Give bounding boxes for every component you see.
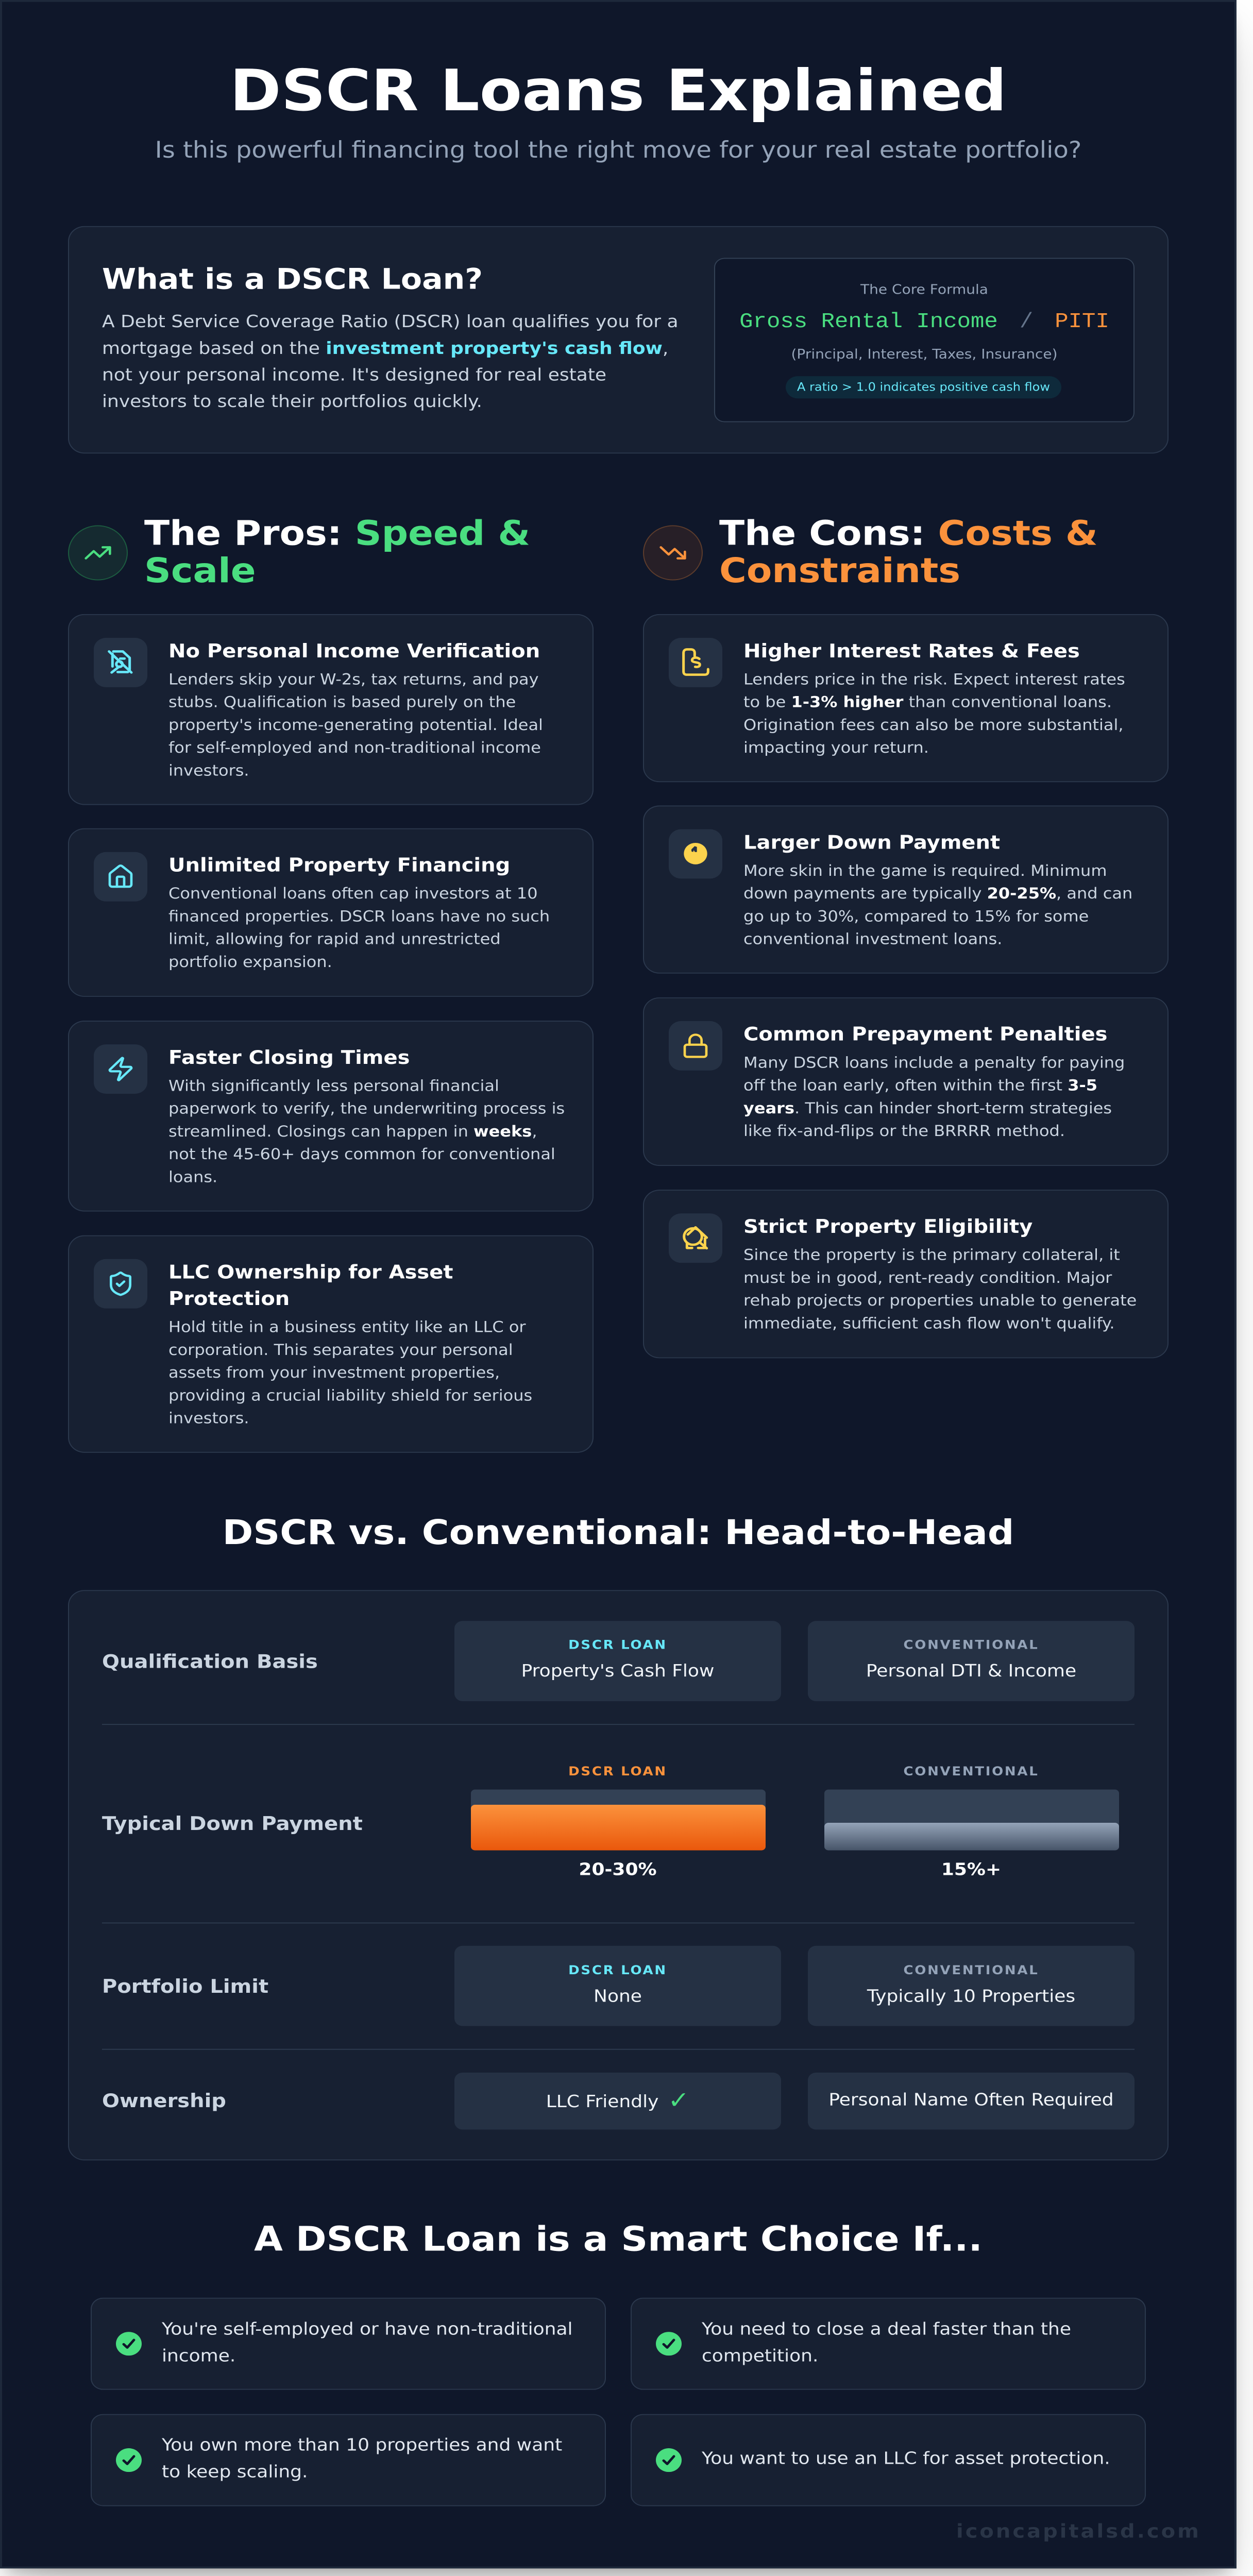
card text (168, 1077, 565, 1186)
card text: assets from your investment properties, (168, 1364, 500, 1382)
icon: lock (669, 1021, 722, 1071)
cons heading text: The Cons: Costs & (719, 513, 1098, 553)
card text: down payments are typically 20-25%, and can (743, 884, 1132, 902)
callout: more than 10 properties (91, 2414, 606, 2506)
card text: impacting your return. (743, 738, 929, 756)
cell: DSCR (454, 1946, 781, 2026)
icon: trending down (643, 526, 703, 580)
card text: More skin in the game is required. Minimum (743, 861, 1107, 879)
panel: pro card faster closing (68, 1021, 594, 1212)
card title: Strict Property Eligibility (743, 1216, 1032, 1238)
card title: No Personal Income Verification (168, 640, 540, 662)
panel: con card prepayment penalties (643, 997, 1169, 1166)
card text: years. This can hinder short-term strategies (743, 1099, 1112, 1117)
card text: Since the property is the primary collateral, it (743, 1246, 1120, 1264)
callout text (702, 2316, 1071, 2369)
heading: head-to-head: DSCR vs. Conventional: Head-to-Head (223, 1512, 1014, 1552)
row label: Typical Down Payment (102, 1813, 363, 1835)
text: definition: mortgage based on the investment property's cash flow, (102, 338, 668, 358)
card title: Larger Down Payment (743, 832, 1000, 854)
bar track (824, 1789, 1119, 1850)
card text: With significantly less personal financial (168, 1077, 499, 1095)
card text: portfolio expansion. (168, 953, 332, 971)
card text (168, 884, 550, 971)
cell value: Typically 10 Properties (867, 1987, 1075, 2006)
card text: go up to 30%, compared to 15% for some (743, 907, 1089, 925)
formula: Gross Rental Income / PITI (739, 310, 1109, 334)
card text: Origination fees can also be more substantial, (743, 716, 1124, 734)
footer: website: iconcapitalsd.com (956, 2520, 1201, 2543)
cell value: None (594, 1987, 642, 2006)
icon: check (656, 2448, 682, 2472)
callout text: competition. (702, 2346, 818, 2366)
panel: con card larger down payment (643, 805, 1169, 974)
card text: loans. (168, 1168, 217, 1186)
card text: Many DSCR loans include a penalty for paying (743, 1054, 1125, 1072)
bar label: CONVENTIONAL (904, 1765, 1039, 1778)
cell value: Personal Name Often Required (828, 2090, 1114, 2110)
card text (168, 1318, 532, 1427)
formula caption: The Core Formula (860, 282, 988, 297)
title: DSCR Loans Explained (230, 58, 1007, 124)
card text: paperwork to verify, the underwriting process is (168, 1099, 565, 1117)
card text (743, 670, 1125, 756)
bar label: DSCR LOAN (568, 1765, 667, 1778)
cell value: Property's Cash Flow (521, 1662, 714, 1681)
card title: Common Prepayment Penalties (743, 1024, 1107, 1045)
callout text: to keep scaling. (162, 2462, 308, 2482)
callout text (162, 2316, 573, 2369)
icon: check (116, 2448, 142, 2472)
card text: immediate, sufficient cash flow won't qualify. (743, 1314, 1115, 1332)
card text: Lenders skip your W-2s, tax returns, and pay (168, 670, 539, 688)
card text (743, 1054, 1125, 1140)
card title: LLC Ownership for Asset (168, 1261, 453, 1283)
bar value: 15%+ (941, 1860, 1001, 1879)
cell value: Personal DTI & Income (866, 1662, 1076, 1681)
panel: pro card no income verification (68, 614, 594, 805)
text: definition: investors to scale their portfolios quickly. (102, 392, 482, 411)
cell label: DSCR LOAN (568, 1638, 667, 1652)
card text: investors. (168, 761, 249, 779)
callout: close faster (631, 2298, 1146, 2390)
card text: corporation. This separates your personal (168, 1341, 513, 1359)
bar fill 75 percent (471, 1805, 766, 1850)
card text: like fix-and-flips or the BRRRR method. (743, 1122, 1065, 1140)
cell label: CONVENTIONAL (904, 1963, 1039, 1977)
card text: off the loan early, often within the first 3-5 (743, 1076, 1097, 1094)
panel: con card strict eligibility (643, 1190, 1169, 1358)
card title: Higher Interest Rates & Fees (743, 640, 1080, 662)
card text: Conventional loans often cap investors at 10 (168, 884, 538, 902)
text: definition (102, 312, 679, 411)
card text: streamlined. Closings can happen in weeks, (168, 1122, 537, 1140)
bar chart: conventional (824, 1765, 1119, 1879)
callout: LLC protection (631, 2414, 1146, 2506)
panel: pro card LLC ownership (68, 1235, 594, 1453)
panel: pro card unlimited financing (68, 828, 594, 997)
card title (168, 1261, 453, 1310)
card text: not the 45-60+ days common for conventional (168, 1145, 555, 1163)
card text: must be in good, rent-ready condition. Major (743, 1268, 1112, 1286)
icon: coin (669, 829, 722, 878)
bar value: 20-30% (579, 1860, 657, 1879)
ratio badge (786, 376, 1061, 398)
text: definition: A Debt Service Coverage Ratio (DSCR) loan qualifies you for a (102, 312, 679, 331)
text: definition: not your personal income. It's designed for real estate (102, 365, 606, 385)
pros heading text: The Pros: Speed & (144, 513, 530, 553)
card text: financed properties. DSCR loans have no such (168, 907, 550, 925)
cons heading text (719, 513, 1098, 590)
icon: check (116, 2332, 142, 2355)
pros heading text: Scale (144, 550, 256, 590)
card text: to be 1-3% higher than conventional loans. (743, 693, 1112, 711)
bar track (471, 1789, 766, 1850)
panel: comparison table (68, 1590, 1169, 2160)
cell: DSCR (454, 1621, 781, 1701)
card text: Hold title in a business entity like an LLC or (168, 1318, 526, 1336)
callout text: You want to use an LLC for asset protection. (702, 2449, 1110, 2468)
row: typical down payment (102, 1765, 1119, 1879)
cons heading text: Constraints (719, 550, 960, 590)
icon: house search (669, 1213, 722, 1263)
row: portfolio limit (102, 1945, 1135, 2026)
heading: what is a DSCR loan: What is a DSCR Loan? (102, 263, 483, 296)
heading: the pros (68, 513, 530, 590)
icon: trending up (68, 526, 128, 580)
card text: stubs. Qualification is based purely on the (168, 693, 516, 711)
formula note: (Principal, Interest, Taxes, Insurance) (791, 346, 1057, 362)
card title: Unlimited Property Financing (168, 854, 510, 876)
card text: property's income-generating potential. Ideal (168, 716, 543, 734)
card text: for self-employed and non-traditional income (168, 738, 541, 756)
card text: investors. (168, 1409, 249, 1427)
callout: self-employed (91, 2298, 606, 2390)
callout text: income. (162, 2346, 235, 2366)
panel: core formula (714, 258, 1135, 422)
card text (743, 861, 1132, 948)
heading: the cons (643, 513, 1098, 590)
cell: conventional (808, 1946, 1135, 2026)
callout text: You own more than 10 properties and want (162, 2435, 562, 2455)
card text (743, 1246, 1137, 1332)
icon: house (94, 852, 147, 902)
subtitle: Is this powerful financing tool the right move for your real estate portfolio? (155, 137, 1081, 163)
cell: DSCR (454, 2073, 781, 2129)
icon: no document (94, 638, 147, 687)
callout text: You need to close a deal faster than the (702, 2319, 1071, 2339)
panel: con card higher rates (643, 614, 1169, 782)
card title: Protection (168, 1288, 290, 1310)
pros heading text (144, 513, 530, 590)
ratio badge: A ratio > 1.0 indicates positive cash flow (797, 380, 1050, 394)
cell value with check: LLC Friendly ✓ (546, 2087, 689, 2114)
cell: conventional (808, 1621, 1135, 1701)
row label: Portfolio Limit (102, 1976, 268, 1997)
card text: limit, allowing for rapid and unrestricted (168, 930, 501, 948)
cell label: CONVENTIONAL (904, 1638, 1039, 1652)
icon: check (656, 2332, 682, 2355)
card text: conventional investment loans. (743, 930, 1002, 948)
card text: Lenders price in the risk. Expect interest rates (743, 670, 1125, 688)
panel: what is a DSCR loan (68, 226, 1169, 453)
row label: Ownership (102, 2090, 226, 2112)
row: qualification basis (102, 1621, 1135, 1701)
bar chart: DSCR (471, 1765, 766, 1879)
row: ownership (102, 2073, 1135, 2130)
callout text: You're self-employed or have non-traditional (162, 2319, 573, 2339)
icon: lightning (94, 1044, 147, 1094)
heading: smart choice: A DSCR Loan is a Smart Choice If... (254, 2219, 983, 2259)
bar fill 45 percent (824, 1823, 1119, 1850)
card text: providing a crucial liability shield for serious (168, 1386, 532, 1404)
row label: Qualification Basis (102, 1651, 318, 1673)
icon: dollar document (669, 638, 722, 687)
card title: Faster Closing Times (168, 1047, 410, 1069)
icon: shield (94, 1259, 147, 1309)
card text (168, 670, 543, 779)
cell: conventional (808, 2073, 1135, 2129)
callout text (162, 2432, 562, 2485)
cell label: DSCR LOAN (568, 1963, 667, 1977)
card text: rehab projects or properties unable to generate (743, 1291, 1137, 1309)
